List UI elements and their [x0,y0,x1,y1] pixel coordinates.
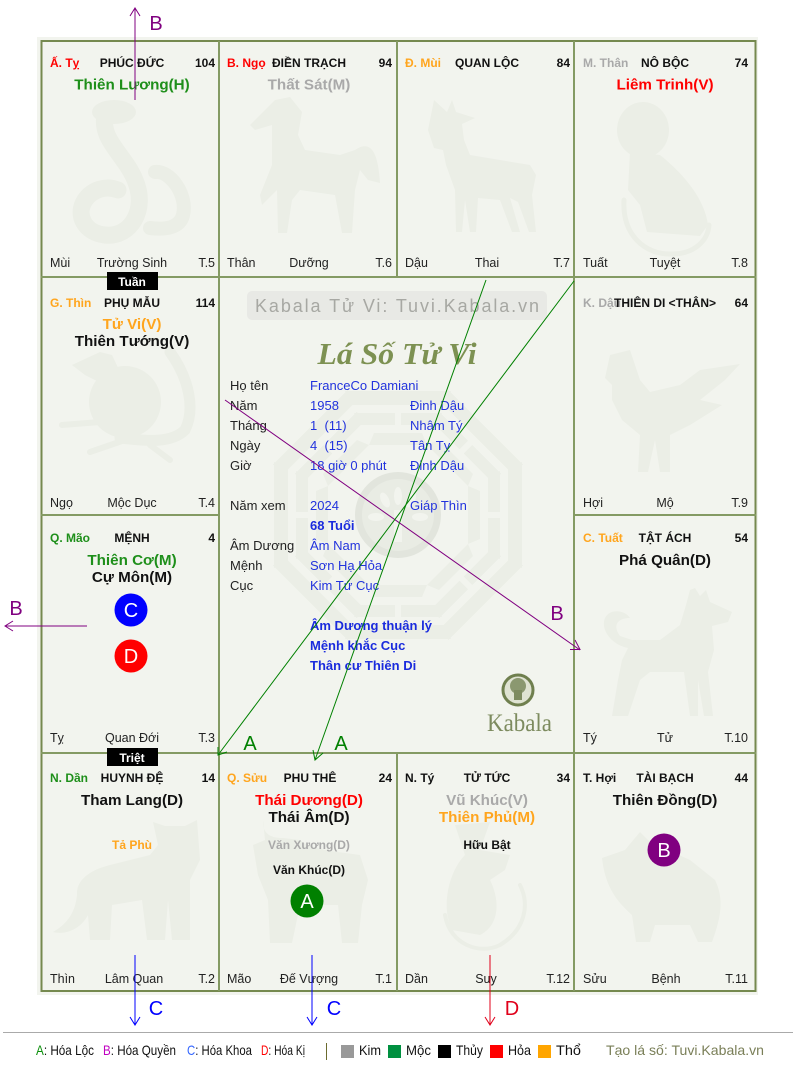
badge: Tuần: Tuần [118,275,146,289]
palace: Quan Lộc: Thai [475,256,499,270]
palace: Phụ Mẫu: Tử Vi(V) [103,316,161,333]
palace: Quan Lộc: 84 [557,56,570,70]
info table: Đinh Dậu [410,458,464,473]
palace: Mệnh: Quan Đới [105,731,159,745]
palace: Phu Thê: PHU THÊ [284,770,336,785]
label: D: D [505,998,519,1020]
palace: Tật Ách: Tý [583,731,598,745]
palace: Tử Tức: Hữu Bật [463,838,511,852]
zodiac: rooster [605,350,740,472]
palace: Nô Bộc: NÔ BỘC [641,55,689,70]
palace: Phúc Đức: 104 [195,56,215,70]
info table: Năm xem [230,498,286,513]
palace: Nô Bộc: Tuyệt [650,256,681,270]
zodiac: rat [445,822,525,949]
arrow: A to Phu Thê [313,280,486,760]
palace: Tật Ách: Tử [657,731,673,745]
palace: Tử Tức: TỬ TỨC [464,770,511,785]
palace: Quan Lộc: T.7 [553,256,570,270]
palace: Mệnh: Cự Môn(M) [92,569,172,586]
legend: transformations: C: Hóa Khoa [187,1042,252,1058]
palace: Tử Tức: T.12 [546,972,570,986]
palace: Tài Bạch: TÀI BẠCH [636,770,694,785]
palace: Tài Bạch [583,770,748,986]
palace: Quan Lộc: Đ. Mùi [405,56,441,70]
palace grid [41,41,756,991]
label: B top: B [149,13,163,35]
watermark: bagua [273,390,523,640]
info table: Nhâm Tý [410,418,463,433]
legend: transformations [36,1042,305,1058]
palace: Quan Lộc: QUAN LỘC [455,55,519,70]
palace: Thiên Di: THIÊN DI <THÂN> [614,295,716,310]
zodiac: goat [428,100,536,232]
palace: Nô Bộc: T.8 [731,256,748,270]
palace: Huynh Đệ: T.2 [198,972,215,986]
palace: Nô Bộc [583,55,748,270]
marker: C [114,594,148,626]
palace: Phúc Đức: T.5 [198,256,215,270]
palace: Tật Ách: TẬT ÁCH [639,530,691,545]
zodiac: monkey [617,102,709,254]
info table: Tân Tỵ [410,438,451,453]
badge: Tuần [107,272,158,290]
website banner [247,291,547,320]
palace: Tài Bạch: 44 [735,771,748,785]
info table: 18 giờ 0 phút [310,458,387,473]
badge: Triệt [107,748,158,766]
palace: Huynh Đệ: Thìn [50,972,75,986]
palace: Phụ Mẫu: Mộc Dục [107,496,157,510]
info table: Ngày [230,438,261,453]
palace: Phu Thê: 24 [379,771,392,785]
palace: Phu Thê: Văn Xương(D) [268,838,350,852]
legend: transformations: A: Hóa Lộc [36,1042,94,1058]
palace: Phụ Mẫu [50,295,215,510]
heading: Lá Số Tử Vi: Lá Số Tử Vi [316,336,477,371]
palace: Phu Thê: Thái Âm(D) [268,808,350,826]
palace: Mệnh: Q. Mão [50,531,90,545]
palace: Tật Ách: T.10 [724,731,748,745]
info table: Âm Dương thuận lý [310,618,433,633]
palace: Phụ Mẫu: Ngọ [50,496,73,510]
palace: Tài Bạch: T. Hợi [583,771,616,785]
palace: Tài Bạch: Sửu [583,972,607,986]
palace: Phúc Đức [50,55,215,270]
palace: Điền Trạch [227,55,392,270]
legend: elements: Mộc [406,1042,431,1058]
legend: transformations: D: Hóa Kị [261,1042,305,1058]
palace: Thiên Di: Mộ [656,496,674,510]
label: A right: A [334,733,348,755]
zodiac: ox [253,820,368,943]
palace: Phúc Đức: PHÚC ĐỨC [100,55,165,70]
logo: Kabala: Kabala [487,710,552,737]
palace: Phu Thê: Q. Sửu [227,771,267,785]
palace: Huynh Đệ: HUYNH ĐỆ [101,770,163,785]
palace: Điền Trạch: B. Ngọ [227,56,266,70]
info table: Họ tên [230,378,268,393]
zodiac: snake [81,100,184,235]
info table: Mệnh [230,558,263,573]
marker: B [648,834,680,866]
palace: Tử Tức: Dần [405,972,428,986]
palace: Mệnh: 4 [208,531,215,545]
info table: Thân cư Thiên Di [310,658,416,673]
info table: Tháng [230,418,267,433]
palace: Tài Bạch: T.11 [725,972,748,986]
palace: Nô Bộc: M. Thân [583,56,628,70]
palace: Phúc Đức: Ấ. Tỵ [50,55,80,70]
info table: Giờ [230,458,252,473]
info table: Sơn Hạ Hỏa [310,558,383,573]
palace: Điền Trạch: ĐIỀN TRẠCH [272,55,346,70]
label: C left: C [149,998,163,1020]
label: B left: B [9,598,23,620]
palace: Thiên Di: T.9 [731,496,748,510]
palace: Mệnh [50,530,215,745]
palace: Điền Trạch: 94 [379,56,392,70]
arrow: C Phu Thê [307,955,317,1025]
arrow: B diagonal [225,400,580,650]
info table: Âm Nam [310,538,361,553]
palace: Tử Tức: 34 [557,771,570,785]
info table: FranceCo Damiani [310,378,418,393]
palace: Phu Thê: Văn Khúc(D) [273,863,345,877]
palace: Phu Thê: T.1 [375,972,392,986]
info table: Mệnh khắc Cục [310,638,405,653]
zodiac: tiger [53,820,200,940]
palace: Tử Tức: N. Tý [405,771,435,785]
arrow: A to Huynh Đệ [218,281,574,755]
info table: Cục [230,578,254,593]
arrow: B up [130,8,140,100]
zodiac: dog [604,588,732,716]
palace: Phụ Mẫu: Thiên Tướng(V) [75,333,189,350]
legend: elements: Kim [359,1042,381,1058]
palace: Mệnh: Tỵ [50,731,65,745]
palace: Thiên Di: 64 [735,296,748,310]
palace: Huynh Đệ: N. Dần [50,771,88,785]
palace: Tật Ách: 54 [735,531,748,545]
zodiac: dragon [62,352,190,460]
legend: elements [341,1042,581,1058]
badge: Triệt: Triệt [119,751,145,765]
marker: B: B [657,840,671,862]
palace: Phụ Mẫu: PHỤ MẪU [104,295,160,310]
palace: Thiên Di: Hợi [583,496,603,510]
info table: Giáp Thìn [410,498,467,513]
label: C right: C [327,998,341,1020]
info table: Đinh Dậu [410,398,464,413]
info table: 1 (11) [310,418,347,433]
legend separator [326,1043,327,1060]
palace: Quan Lộc [405,55,570,270]
legend: elements: Thủy [456,1042,483,1058]
marker: D [114,640,148,672]
marker: C: C [124,600,138,622]
arrow: C Huynh Đệ [130,955,140,1025]
palace: Nô Bộc: 74 [735,56,748,70]
info table: 1958 [310,398,339,413]
zodiac: horse [250,97,380,233]
info table: Kim Tứ Cục [310,578,380,593]
palace: Huynh Đệ: Tham Lang(D) [81,792,183,809]
palace: Mệnh: Thiên Cơ(M) [87,552,177,569]
palace: Tài Bạch: Thiên Đồng(D) [613,792,717,809]
palace: Tử Tức [405,770,570,986]
palace: Tử Tức: Suy [475,972,498,986]
palace: Huynh Đệ: 14 [202,771,215,785]
info table: Âm Dương [230,538,294,553]
divider [3,1032,793,1033]
palace: Thiên Di: K. Dậu [583,296,621,310]
marker: A: A [300,891,314,913]
marker: D: D [124,646,138,668]
palace: Tật Ách: C. Tuất [583,531,623,545]
palace: Quan Lộc: Dậu [405,256,428,270]
palace: Phu Thê: Mão [227,972,251,986]
palace: Điền Trạch: Thân [227,256,256,270]
info table [230,378,467,673]
palace: Huynh Đệ: Tả Phù [112,838,152,852]
palace: Phu Thê: Đế Vượng [280,972,338,986]
palace: Mệnh: MỆNH [114,530,150,545]
palace: Tử Tức: Vũ Khúc(V) [446,792,528,809]
palace: Nô Bộc: Tuất [583,256,608,270]
palace: Nô Bộc: Liêm Trinh(V) [616,76,714,94]
palace: Thiên Di [583,295,748,510]
palace: Phúc Đức: Trường Sinh [97,256,167,270]
palace: Phụ Mẫu: T.4 [198,496,215,510]
website banner: Kabala Tử Vi: Tuvi.Kabala.vn [255,296,539,316]
palace: Mệnh: T.3 [198,731,215,745]
palace: Huynh Đệ [50,770,215,986]
info table: 68 Tuổi [310,518,355,533]
palace: Phúc Đức: Mùi [50,256,70,270]
palace: Tật Ách: Phá Quân(D) [619,552,711,569]
palace: Phúc Đức: Thiên Lương(H) [74,76,190,94]
legend: elements: Hỏa [508,1042,531,1058]
info table: Năm [230,398,257,413]
palace: Phụ Mẫu: 114 [196,296,215,310]
palace: Tật Ách [583,530,748,745]
palace: Điền Trạch: T.6 [375,256,392,270]
arrow: D [485,955,495,1025]
logo: Kabala [487,675,552,737]
legend: transformations: B: Hóa Quyền [103,1042,176,1058]
palace: Tài Bạch: Bệnh [651,972,681,986]
marker: A [290,884,324,918]
info table: 4 (15) [310,438,348,453]
palace: Điền Trạch: Thất Sát(M) [268,76,350,94]
info table: 2024 [310,498,339,513]
palace: Tử Tức: Thiên Phủ(M) [439,809,535,826]
palace: Phụ Mẫu: G. Thìn [50,296,91,310]
zodiac: pig [602,832,721,942]
arrow: B left [5,621,87,631]
legend: site link: Tạo lá số: Tuvi.Kabala.vn [606,1042,764,1058]
palace: Phu Thê: Thái Dương(D) [255,792,363,809]
legend: elements: Thổ [556,1042,581,1058]
palace: Phu Thê [227,770,392,986]
palace: Điền Trạch: Dưỡng [289,256,329,270]
label: B diagonal: B [550,603,564,625]
palace: Huynh Đệ: Lâm Quan [105,972,163,986]
label: A left: A [243,733,257,755]
